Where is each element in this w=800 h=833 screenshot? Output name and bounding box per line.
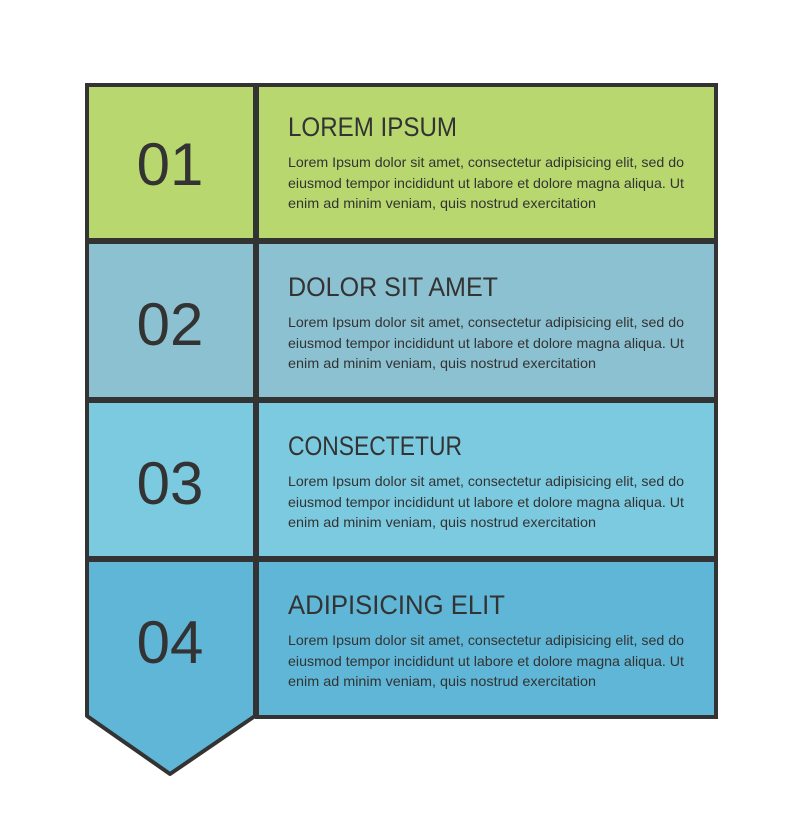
text panel 1 xyxy=(257,85,716,240)
text panel 1: LOREM IPSUM xyxy=(288,112,457,142)
row 2 xyxy=(87,242,716,399)
text panel 2: DOLOR SIT AMET xyxy=(288,272,498,302)
text panel 1: enim ad minim veniam, quis nostrud exercitation xyxy=(288,195,596,211)
number box 01: 01 xyxy=(137,131,203,198)
text panel 3 xyxy=(257,401,716,558)
number box 01 xyxy=(87,85,255,240)
text panel 4 xyxy=(257,560,716,717)
text panel 4: Lorem Ipsum dolor sit amet, consectetur adipisicing elit, sed do xyxy=(288,632,684,648)
text panel 1: eiusmod tempor incididunt ut labore et dolore magna aliqua. Ut xyxy=(288,175,684,191)
text panel 2: Lorem Ipsum dolor sit amet, consectetur adipisicing elit, sed do xyxy=(288,314,684,330)
text panel 3: eiusmod tempor incididunt ut labore et dolore magna aliqua. Ut xyxy=(288,494,684,510)
number box 03: 03 xyxy=(137,450,203,517)
text panel 4: ADIPISICING ELIT xyxy=(288,590,505,620)
text panel 4: enim ad minim veniam, quis nostrud exercitation xyxy=(288,673,596,689)
text panel 2 xyxy=(257,242,716,399)
text panel 1: Lorem Ipsum dolor sit amet, consectetur adipisicing elit, sed do xyxy=(288,154,684,170)
row 1 xyxy=(87,85,716,240)
text panel 4: eiusmod tempor incididunt ut labore et dolore magna aliqua. Ut xyxy=(288,653,684,669)
number box 02 xyxy=(87,242,255,399)
number box 03 xyxy=(87,401,255,558)
text panel 2: enim ad minim veniam, quis nostrud exercitation xyxy=(288,355,596,371)
number box 04 arrow xyxy=(87,560,255,774)
text panel 3: CONSECTETUR xyxy=(288,431,462,461)
row 3 xyxy=(87,401,716,558)
text panel 2: eiusmod tempor incididunt ut labore et dolore magna aliqua. Ut xyxy=(288,335,684,351)
number box 04 arrow: 04 xyxy=(137,609,203,676)
text panel 3: enim ad minim veniam, quis nostrud exercitation xyxy=(288,514,596,530)
row 4 xyxy=(87,560,716,774)
number box 02: 02 xyxy=(137,291,203,358)
text panel 3: Lorem Ipsum dolor sit amet, consectetur adipisicing elit, sed do xyxy=(288,473,684,489)
